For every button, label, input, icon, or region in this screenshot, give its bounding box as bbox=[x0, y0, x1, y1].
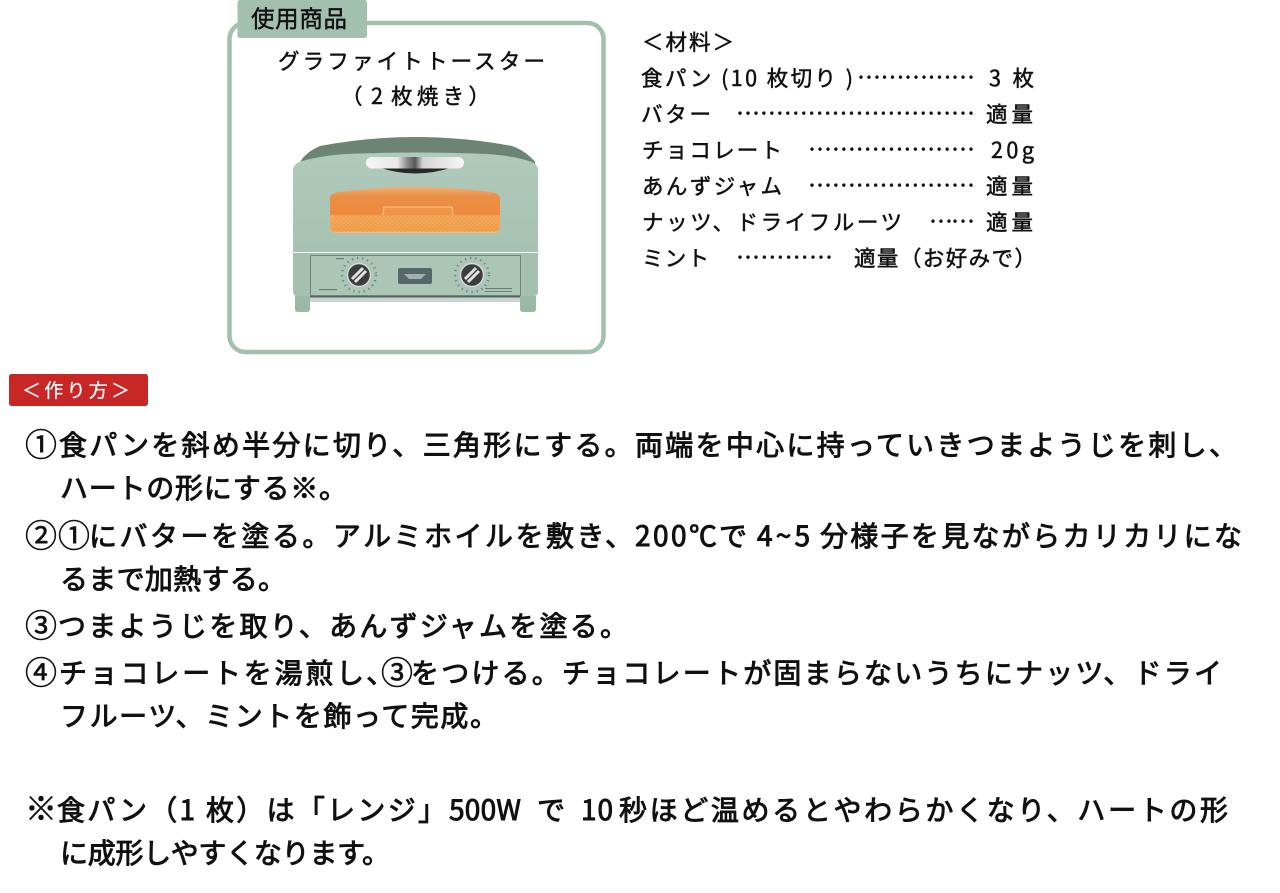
note: 秒ほど温めるとやわらかくなり、ハートの形 bbox=[619, 789, 1228, 829]
ingredient: chocolate: チョコレート bbox=[642, 134, 782, 165]
ingredient: nuts and dried fruit: ナッツ、ドライフルーツ bbox=[642, 206, 902, 237]
step 4: チョコレートを湯煎し､ bbox=[59, 652, 381, 692]
step 2: にバターを塗る。アルミホイルを敷き、 bbox=[89, 515, 633, 555]
step 4: ③ bbox=[381, 648, 413, 694]
ingredient: butter: バター bbox=[641, 98, 711, 129]
heading: how to make: ＜作り方＞ bbox=[22, 376, 130, 403]
step 4 bbox=[25, 648, 1222, 735]
product capacity bbox=[341, 80, 490, 111]
right dial bbox=[455, 258, 489, 292]
note bbox=[25, 784, 1228, 872]
toaster lower casing bbox=[293, 253, 538, 296]
toaster window bbox=[330, 187, 500, 233]
ingredient: bread bbox=[641, 58, 1034, 93]
ingredient: mint: ………… bbox=[736, 238, 833, 273]
ingredient: butter: ………………………… bbox=[736, 94, 975, 129]
logo plate bbox=[398, 268, 432, 284]
step 2: ① bbox=[58, 511, 90, 557]
ingredient: nuts and dried fruit: 適量 bbox=[986, 206, 1033, 237]
step 2: 4~5 bbox=[757, 515, 810, 555]
ingredient: apricot jam: ………………… bbox=[808, 166, 975, 201]
step 1: ハートの形にする※。 bbox=[60, 467, 347, 507]
product capacity: 枚焼き） bbox=[391, 80, 490, 111]
heading: how to make bbox=[9, 374, 148, 406]
ingredient: apricot jam bbox=[642, 166, 1033, 201]
ingredient: nuts and dried fruit: …… bbox=[929, 202, 975, 237]
note: 500W bbox=[449, 789, 521, 829]
product capacity: （ bbox=[341, 80, 363, 111]
step 2: ② bbox=[25, 511, 57, 557]
ingredient: chocolate: ………………… bbox=[808, 130, 975, 165]
toaster top bbox=[300, 137, 535, 172]
ingredient: butter bbox=[641, 94, 1033, 129]
note: に成形しやすくなります。 bbox=[60, 832, 390, 872]
ingredient: chocolate: 20g bbox=[991, 134, 1034, 165]
icon: toaster bbox=[293, 137, 538, 312]
note: ※ bbox=[25, 784, 57, 830]
panel: product used bbox=[230, 0, 604, 352]
product tab bbox=[238, 0, 367, 38]
product capacity: 2 bbox=[371, 80, 383, 111]
toaster feet bbox=[295, 296, 536, 312]
step 4: ④ bbox=[25, 648, 57, 694]
step 4: フルーツ、ミントを飾って完成。 bbox=[60, 695, 498, 735]
step 2: で bbox=[719, 515, 747, 555]
ingredient: bread: 食パン (10 枚切り ) bbox=[641, 62, 853, 93]
step 1: ① bbox=[25, 420, 57, 466]
ingredient: mint: 適量（お好みで） bbox=[854, 242, 1036, 273]
step 4: をつける。チョコレートが固まらないうちにナッツ、ドライ bbox=[411, 652, 1222, 692]
step 2: 200℃ bbox=[635, 515, 717, 555]
step 2: 分様子を見ながらカリカリにな bbox=[820, 515, 1242, 555]
toaster body bbox=[293, 152, 538, 252]
ingredients heading: ＜材料＞ bbox=[642, 26, 734, 57]
small panel markings bbox=[319, 258, 512, 292]
product name: グラファイトトースター bbox=[278, 45, 545, 76]
toaster handle bbox=[366, 157, 464, 174]
step 3: つまようじを取り、あんずジャムを塗る。 bbox=[58, 605, 628, 645]
step 1: 食パンを斜め半分に切り、三角形にする。両端を中心に持っていきつまようじを刺し、 bbox=[59, 424, 1237, 464]
ingredient: mint bbox=[642, 238, 1036, 273]
ingredient: bread: 3 枚 bbox=[989, 62, 1034, 93]
ingredient: bread: …………… bbox=[857, 58, 975, 93]
ingredient: nuts and dried fruit bbox=[642, 202, 1033, 237]
note: 10 bbox=[581, 789, 613, 829]
ingredient: apricot jam: 適量 bbox=[986, 170, 1033, 201]
ingredient: apricot jam: あんずジャム bbox=[642, 170, 782, 201]
left dial bbox=[342, 258, 376, 292]
step 2: るまで加熱する。 bbox=[60, 558, 286, 598]
ingredient: butter: 適量 bbox=[986, 98, 1033, 129]
ingredient: chocolate bbox=[642, 130, 1034, 165]
ingredient: mint: ミント bbox=[642, 242, 709, 273]
note: で bbox=[537, 789, 565, 829]
step 2 bbox=[25, 511, 1242, 598]
product tab: 使用商品 bbox=[251, 0, 347, 34]
panel frame bbox=[230, 23, 604, 352]
ingredients list bbox=[641, 26, 1036, 273]
steps bbox=[25, 420, 1242, 735]
toaster control panel bbox=[310, 256, 520, 302]
step 1 bbox=[25, 420, 1237, 507]
note: 食パン（1 枚）は「レンジ」 bbox=[57, 789, 446, 829]
step 3: ③ bbox=[25, 601, 57, 647]
